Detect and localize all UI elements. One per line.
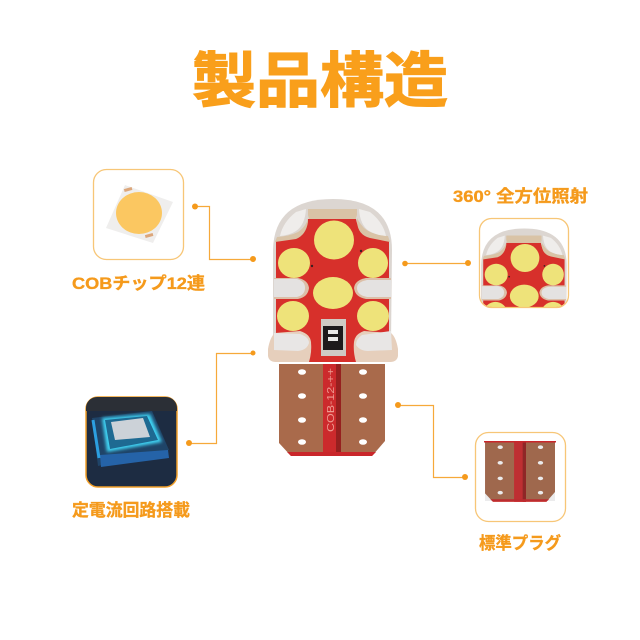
connector line bbox=[402, 260, 471, 266]
image card: plug close-up bbox=[476, 432, 566, 522]
lower silicone flange windows bbox=[268, 331, 398, 362]
callout: COB chip bbox=[72, 170, 256, 293]
image card: bulb close-up bbox=[478, 218, 570, 308]
infographic canvas bbox=[72, 50, 588, 551]
connector line bbox=[395, 402, 468, 480]
main product: T10 LED bulb bbox=[268, 199, 398, 456]
title: 製品構造 bbox=[192, 48, 448, 115]
callout: 360 degree lighting bbox=[402, 187, 588, 308]
bulb silicone dome with LED chips bbox=[268, 199, 398, 362]
image card: circuit chip bbox=[86, 397, 177, 487]
board marking: COB-12-++ bbox=[325, 368, 337, 432]
label: 360° 全方位照射 bbox=[453, 186, 588, 206]
icon: COB LED chip bbox=[106, 185, 173, 243]
resistor component bbox=[321, 319, 346, 356]
image card: COB chip bbox=[94, 170, 184, 260]
label: COBチップ12連 bbox=[72, 274, 205, 293]
bulb plug base bbox=[279, 364, 385, 456]
connector line bbox=[192, 204, 256, 262]
icon: glowing processor bbox=[86, 397, 177, 467]
label: 標準プラグ bbox=[479, 533, 561, 553]
callout: constant current circuit bbox=[72, 350, 256, 520]
connector line bbox=[186, 350, 256, 446]
label: 定電流回路搭載 bbox=[72, 501, 190, 520]
callout: standard plug bbox=[395, 402, 566, 553]
